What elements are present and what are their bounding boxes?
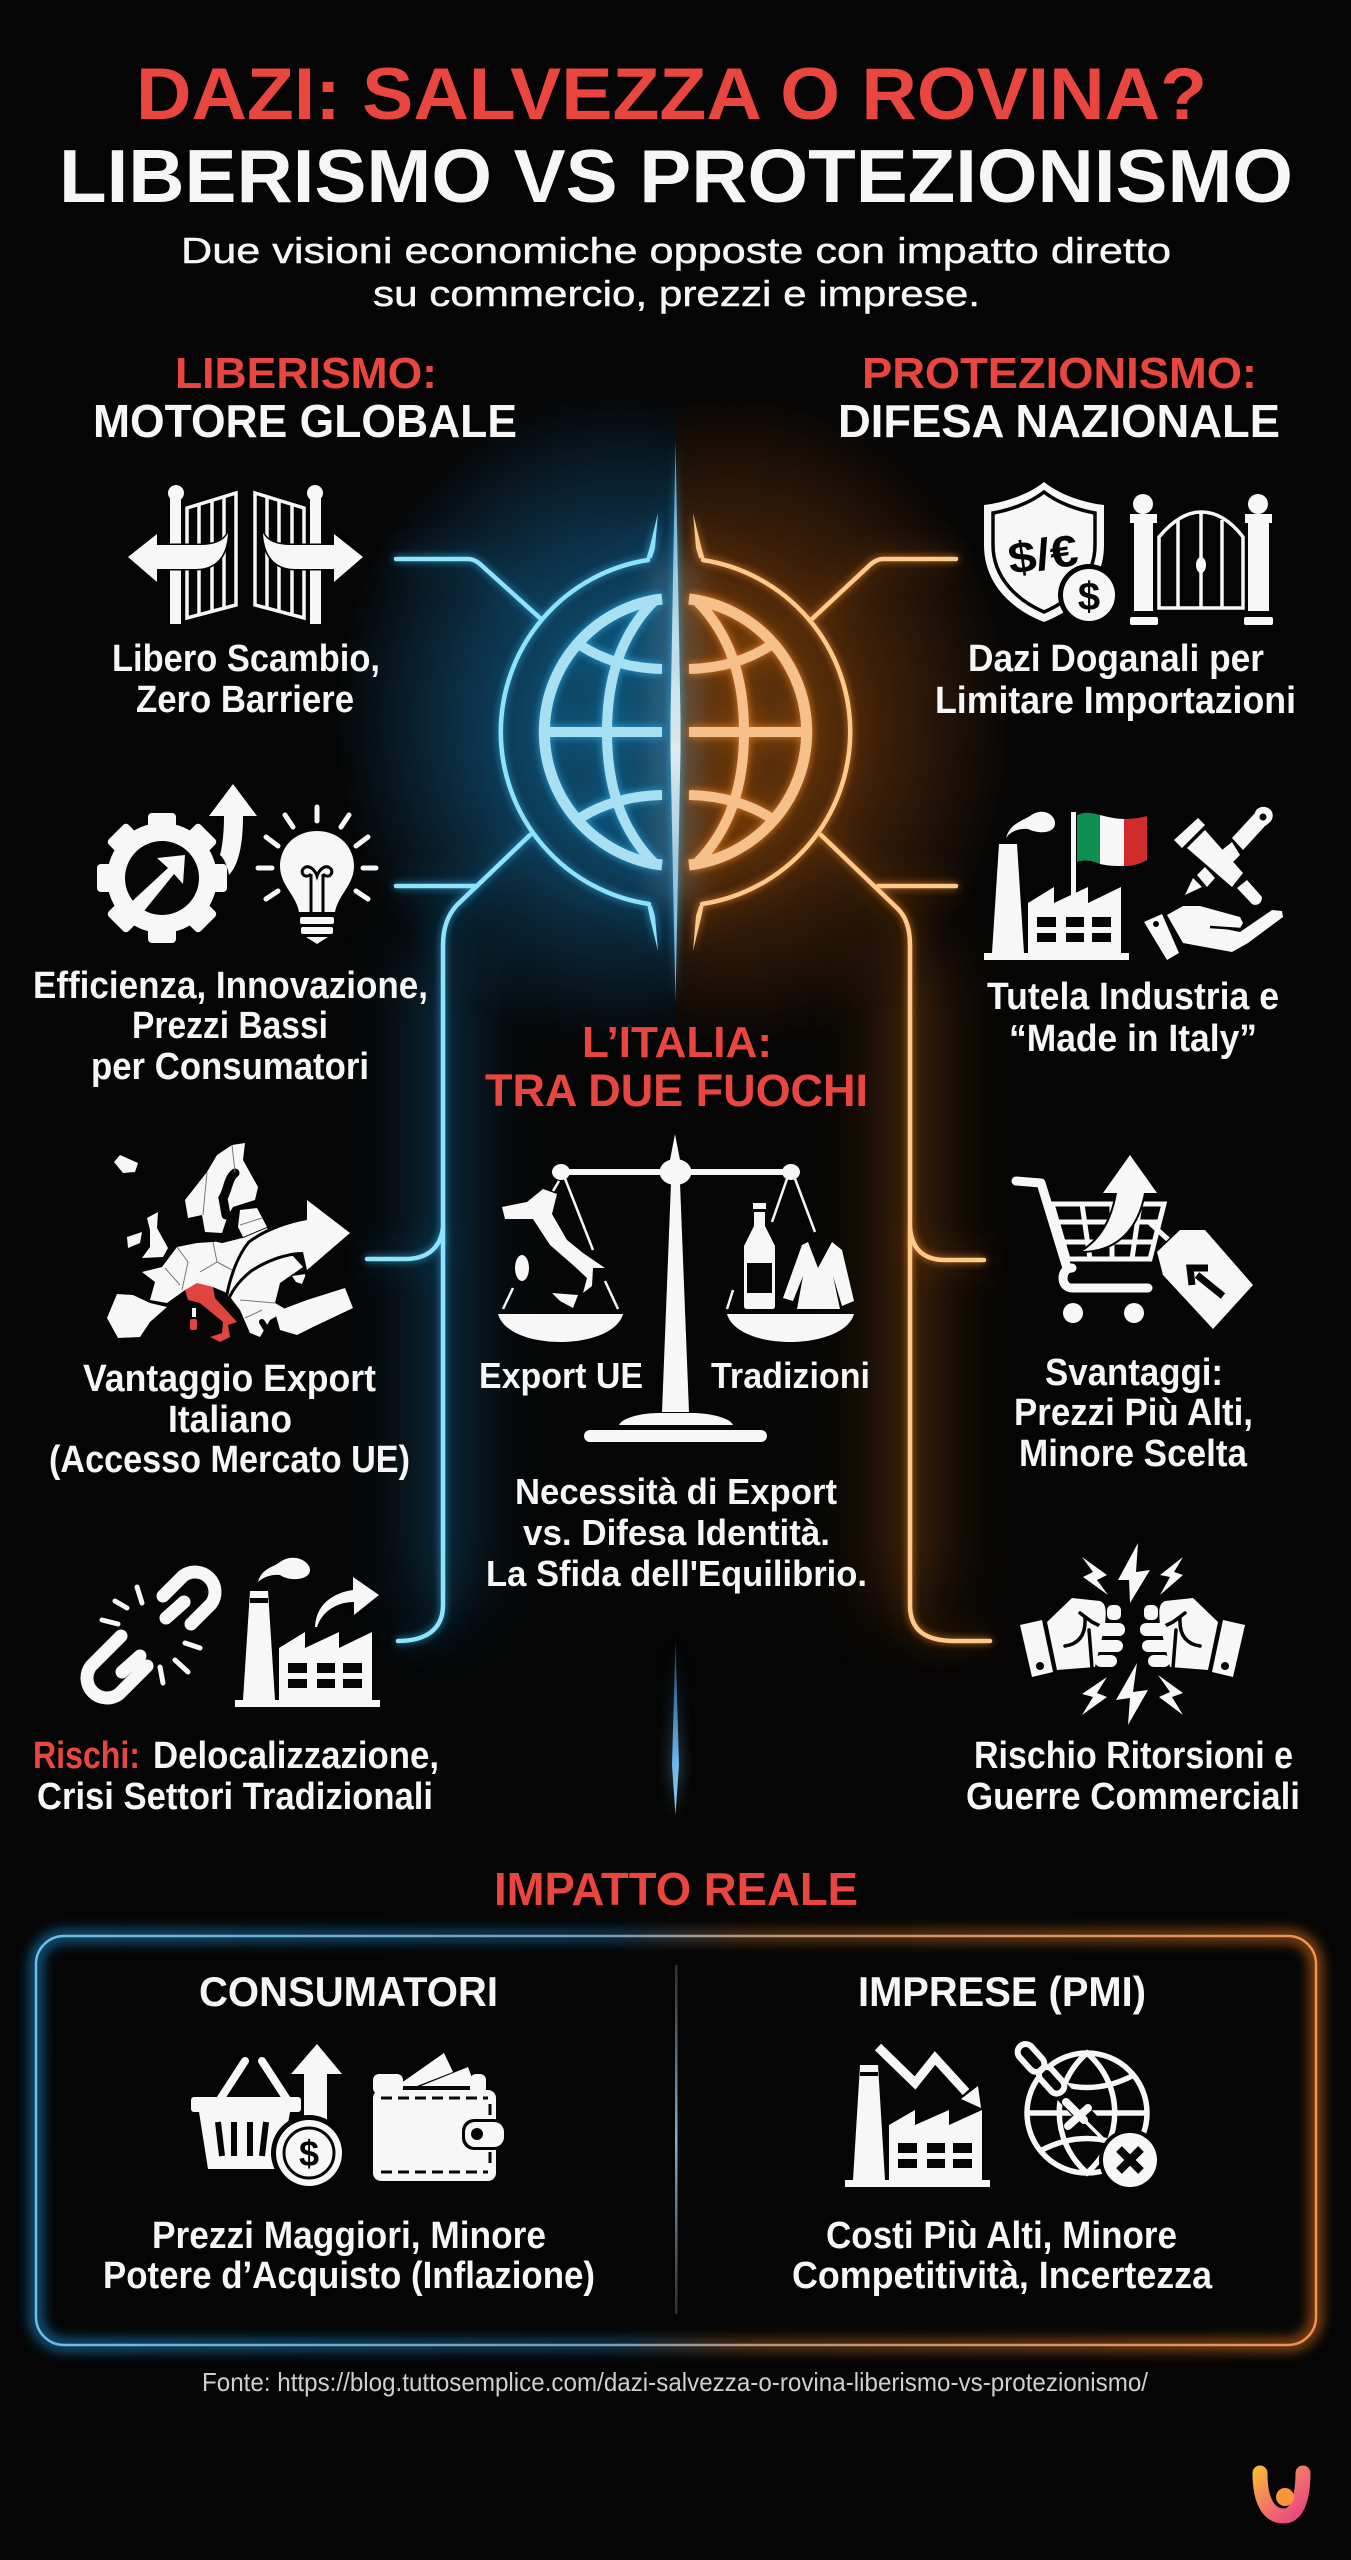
label: Dazi Doganali per xyxy=(968,638,1264,680)
label: Efficienza, Innovazione, xyxy=(33,965,428,1007)
icon: left fist xyxy=(1020,1598,1125,1677)
label: Rischi: xyxy=(33,1735,140,1777)
icon: gear with arrow xyxy=(97,784,257,943)
panel: imprese: IMPRESE (PMI) xyxy=(858,1968,1146,2015)
center panel: l'italia xyxy=(479,1018,870,1594)
heading: protezionismo: DIFESA NAZIONALE xyxy=(838,395,1280,447)
label: Prezzi Maggiori, Minore xyxy=(152,2215,546,2257)
icon: shield with currency xyxy=(984,482,1120,626)
label: Vantaggio Export xyxy=(83,1358,376,1400)
panel: impatto reale xyxy=(36,1936,1316,2345)
label: Minore Scelta xyxy=(1019,1433,1248,1475)
icon: broken chain link xyxy=(87,1572,215,1698)
subtitle xyxy=(181,230,1171,314)
heading: impatto reale: IMPATTO REALE xyxy=(494,1863,858,1915)
icon: shield with currency: $/€ xyxy=(1005,526,1081,584)
globe: orange half xyxy=(689,599,809,865)
heading: protezionismo xyxy=(838,349,1280,447)
icon: factory relocating xyxy=(235,1558,380,1707)
label xyxy=(966,1735,1300,1818)
item: tutela industria xyxy=(984,807,1283,1060)
heading: protezionismo: PROTEZIONISMO: xyxy=(862,349,1257,398)
icon: basket with rising price xyxy=(191,2044,347,2191)
icon: basket with rising price: $ xyxy=(299,2133,319,2174)
icon: closed gate xyxy=(1130,494,1273,625)
item: ritorsioni xyxy=(966,1543,1300,1818)
icon: artisan hand and tools xyxy=(1144,807,1283,960)
background glow: orange side xyxy=(676,413,996,1636)
connector lines: orange xyxy=(693,513,990,1641)
label: Costi Più Alti, Minore xyxy=(826,2215,1177,2257)
globe: blue half xyxy=(542,599,662,865)
lower spike xyxy=(672,1640,680,1815)
title: LIBERISMO VS PROTEZIONISMO xyxy=(59,134,1293,218)
icon: bottle and jacket on pan xyxy=(744,1203,854,1309)
item: efficienza xyxy=(33,784,428,1088)
icon: balance scale xyxy=(498,1134,854,1442)
label xyxy=(792,2215,1213,2297)
subtitle: su commercio, prezzi e imprese. xyxy=(373,273,980,314)
icon: europe map with arrow xyxy=(107,1143,353,1342)
subtitle: Due visioni economiche opposte con impatto diretto xyxy=(181,230,1171,271)
background glow: blue side xyxy=(352,409,676,1636)
icon: shopping cart with price tag xyxy=(1016,1155,1253,1329)
label xyxy=(987,976,1279,1060)
description xyxy=(486,1471,867,1594)
label xyxy=(1014,1352,1253,1475)
icon: wallet xyxy=(373,2053,506,2181)
label xyxy=(33,1735,439,1818)
label: Tutela Industria e xyxy=(987,976,1279,1018)
icon: factory with italian flag xyxy=(984,812,1147,960)
label: Rischio Ritorsioni e xyxy=(974,1735,1293,1777)
label: “Made in Italy” xyxy=(1009,1018,1257,1060)
scale labels: Tradizioni xyxy=(711,1355,870,1396)
label: Svantaggi: xyxy=(1045,1352,1223,1394)
icon: globe with broken chain xyxy=(1014,2041,1161,2191)
item: libero scambio xyxy=(112,485,380,721)
label xyxy=(112,638,380,721)
icon: light bulb xyxy=(258,807,376,944)
item: vantaggio export xyxy=(49,1143,410,1481)
heading: liberismo: LIBERISMO: xyxy=(175,349,437,398)
icon: italy on pan xyxy=(502,1189,605,1308)
description: vs. Difesa Identità. xyxy=(523,1512,830,1553)
heading: L’ITALIA: xyxy=(582,1018,772,1067)
label xyxy=(103,2215,595,2297)
description: La Sfida dell'Equilibrio. xyxy=(486,1553,867,1594)
heading: liberismo xyxy=(93,349,517,447)
scale labels xyxy=(479,1355,870,1396)
icon: right fist xyxy=(1140,1598,1245,1677)
label: Crisi Settori Tradizionali xyxy=(37,1776,433,1818)
lower spike core xyxy=(672,1640,679,1815)
title xyxy=(59,54,1293,218)
icon: factory with falling chart xyxy=(845,2047,990,2187)
scale labels: Export UE xyxy=(479,1355,643,1396)
label: Delocalizzazione, xyxy=(153,1735,439,1777)
item: svantaggi xyxy=(1014,1155,1253,1475)
label: Libero Scambio, xyxy=(112,638,380,680)
panel: consumatori xyxy=(103,1968,595,2297)
label: Competitività, Incertezza xyxy=(792,2255,1213,2297)
connector lines: blue xyxy=(367,513,658,1641)
icon: clashing fists with lightning xyxy=(1020,1543,1245,1725)
description: Necessità di Export xyxy=(515,1471,837,1512)
label: per Consumatori xyxy=(91,1046,369,1088)
label: Prezzi Bassi xyxy=(132,1005,328,1047)
title: DAZI: SALVEZZA O ROVINA? xyxy=(136,54,1207,135)
item: rischi xyxy=(33,1558,439,1818)
label xyxy=(935,638,1296,722)
heading: liberismo: MOTORE GLOBALE xyxy=(93,395,517,447)
label: Potere d’Acquisto (Inflazione) xyxy=(103,2255,595,2297)
source: Fonte: https://blog.tuttosemplice.com/dazi-salvezza-o-rovina-liberismo-vs-protezionismo/ xyxy=(202,2367,1149,2397)
heading xyxy=(485,1018,868,1116)
label: Prezzi Più Alti, xyxy=(1014,1392,1253,1434)
label xyxy=(33,965,428,1088)
label: Zero Barriere xyxy=(136,679,354,721)
central spike xyxy=(670,440,680,1002)
label: (Accesso Mercato UE) xyxy=(49,1439,410,1481)
label: Italiano xyxy=(168,1399,292,1441)
icon: open gate with arrows xyxy=(128,485,363,624)
icon: shield with currency: $ xyxy=(1078,575,1100,619)
label: Limitare Importazioni xyxy=(935,680,1296,722)
logo xyxy=(1260,2473,1303,2516)
item: dazi doganali xyxy=(935,482,1296,722)
label xyxy=(49,1358,410,1481)
panel: consumatori: CONSUMATORI xyxy=(199,1968,498,2015)
label: Guerre Commerciali xyxy=(966,1776,1300,1818)
heading: TRA DUE FUOCHI xyxy=(485,1065,868,1116)
panel: imprese xyxy=(792,1968,1213,2297)
